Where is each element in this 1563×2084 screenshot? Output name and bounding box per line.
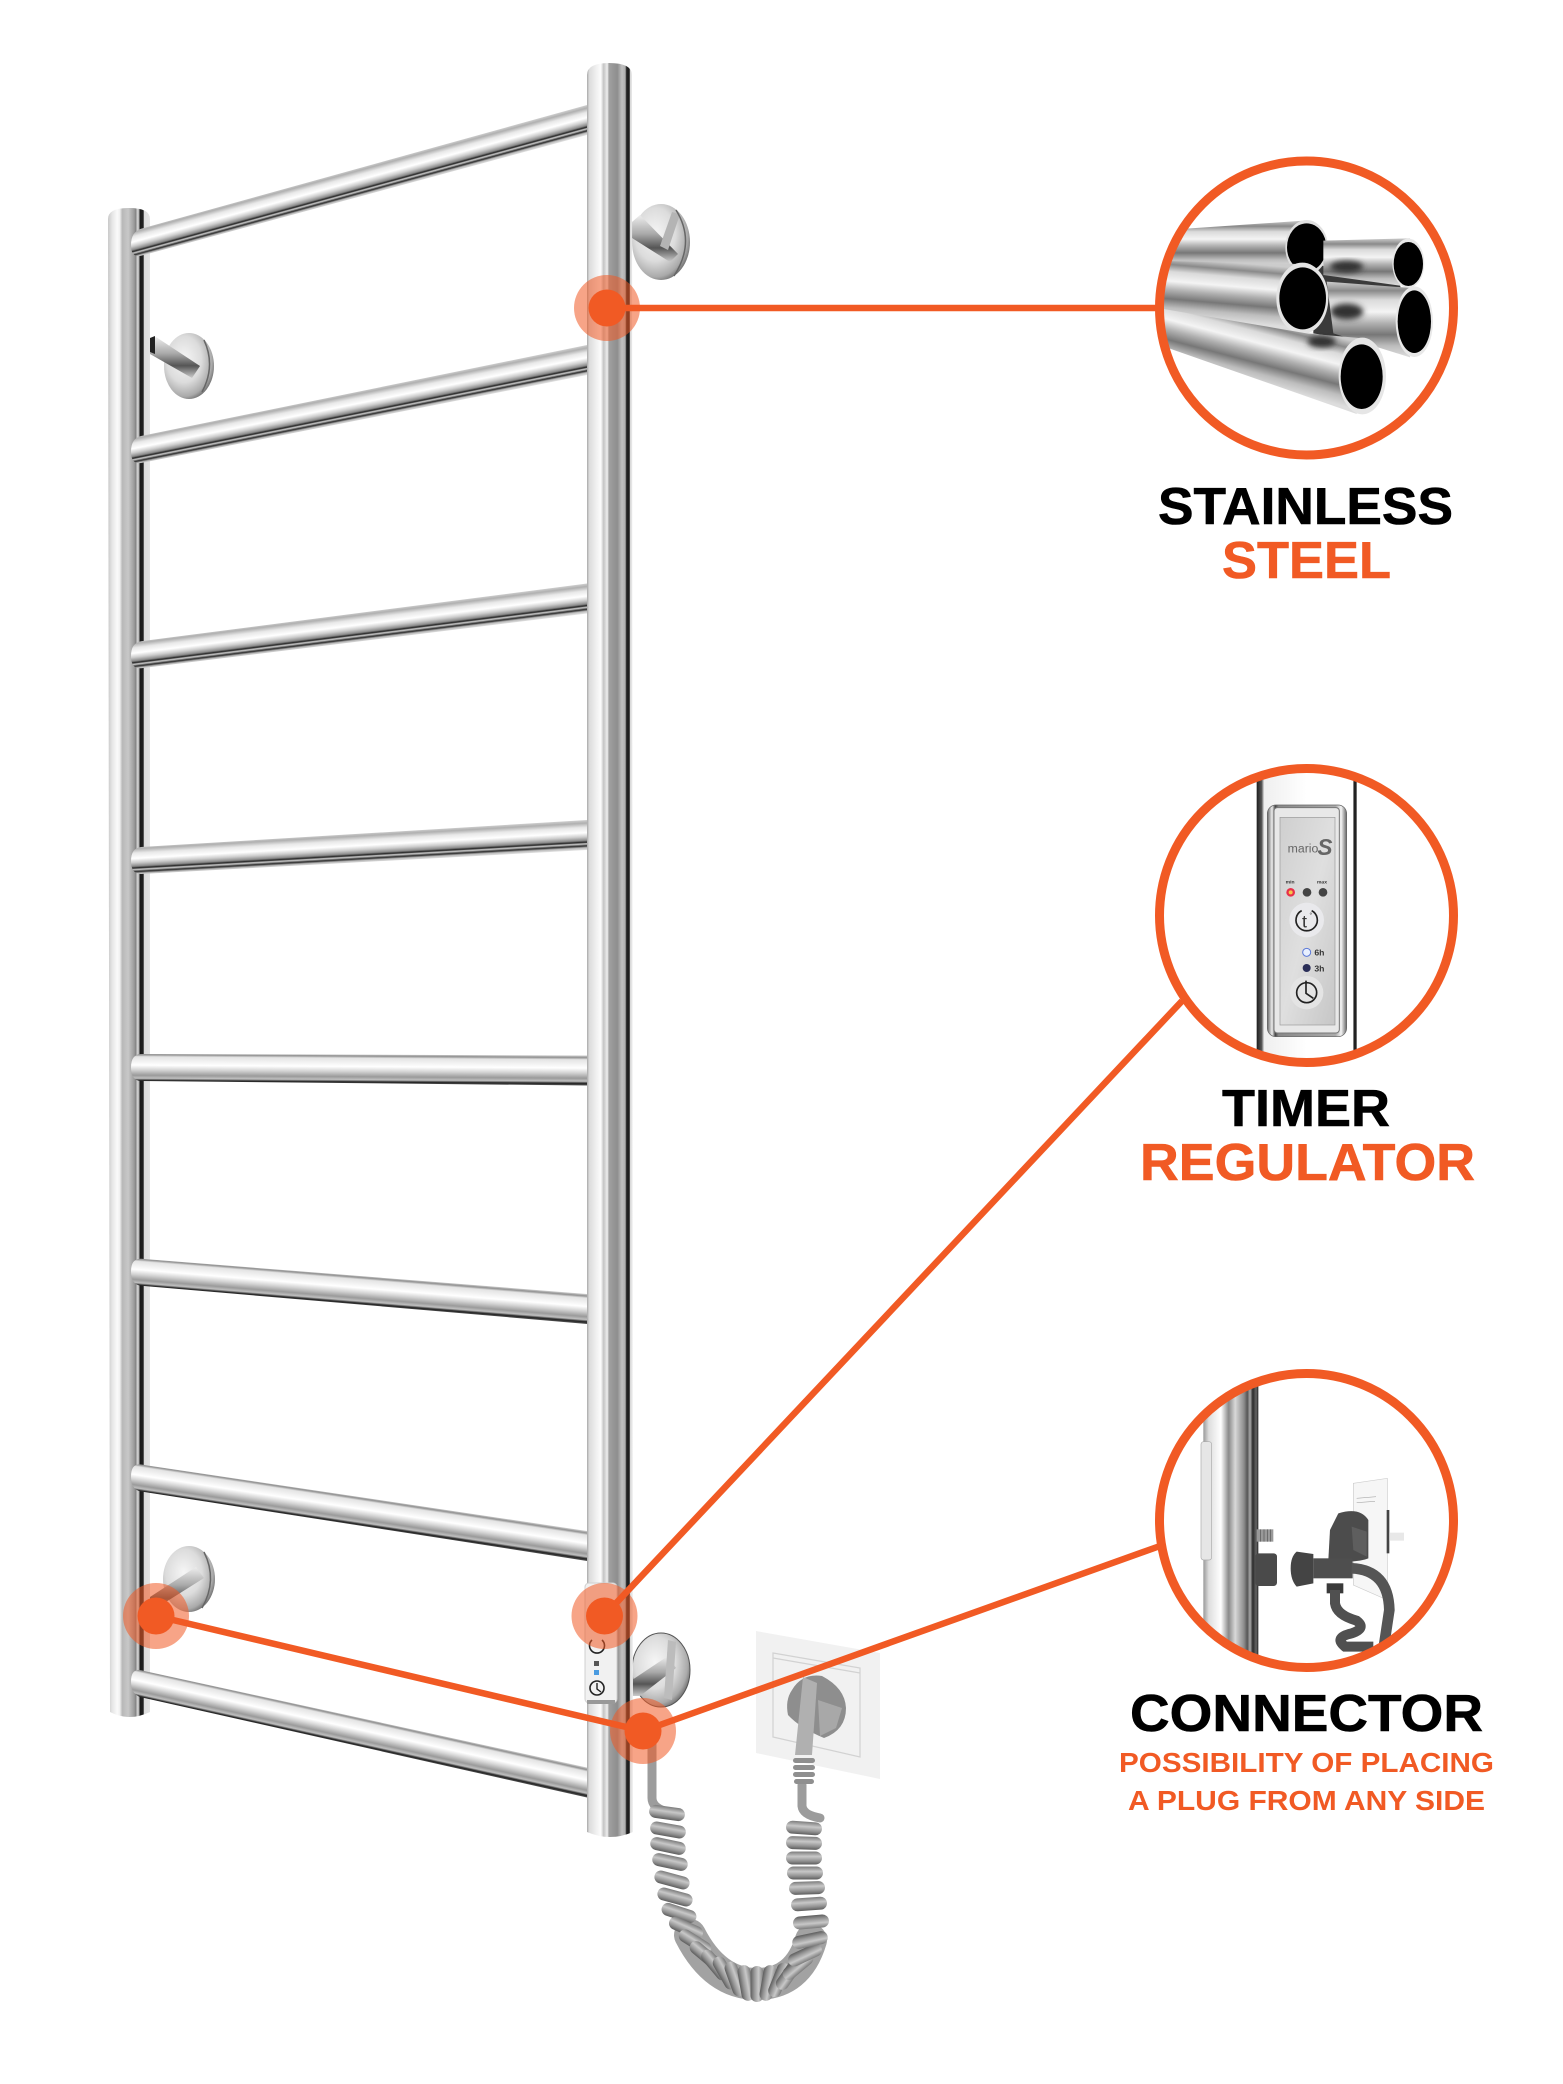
detail circle: control panel: S	[1317, 834, 1332, 860]
panel: connector	[1119, 1370, 1494, 1816]
detail circle: connector	[1160, 1370, 1454, 1677]
detail circle: control panel: min	[1286, 879, 1295, 885]
panel: stainless steel	[1150, 161, 1454, 590]
panel: timer regulator	[1140, 760, 1475, 1192]
heading: stainless steel: STAINLESS	[1158, 478, 1453, 536]
leader line: connector	[643, 1546, 1160, 1731]
control box on post	[585, 1583, 617, 1704]
marker: timer point	[572, 1583, 638, 1649]
plug and spiral cord	[648, 1676, 846, 2002]
left vertical post	[108, 208, 150, 1717]
wall mount: lower left	[150, 1546, 215, 1612]
leader line: left marker to connector marker	[156, 1616, 643, 1731]
heading: connector: CONNECTOR	[1130, 1685, 1483, 1743]
detail circle: control panel: t	[1302, 911, 1307, 931]
detail circle: control panel: °	[1309, 910, 1312, 919]
marker: stainless steel point	[574, 275, 640, 341]
leader line: timer regulator	[604, 1001, 1182, 1616]
detail circle: control panel: 6h	[1314, 948, 1324, 958]
marker: connector point	[610, 1698, 676, 1764]
caption: connector: POSSIBILITY OF PLACING	[1119, 1747, 1494, 1778]
wall mount: upper left	[150, 333, 214, 399]
detail circle: steel tubes	[1150, 161, 1454, 455]
wall mount: upper right	[632, 204, 690, 280]
detail circle: control panel: mario	[1288, 841, 1319, 855]
heading: timer regulator: REGULATOR	[1140, 1134, 1475, 1192]
horizontal bars	[131, 105, 587, 1798]
detail circle: control panel: max	[1317, 879, 1327, 885]
caption: connector	[1119, 1747, 1494, 1816]
caption: connector: A PLUG FROM ANY SIDE	[1128, 1785, 1485, 1816]
marker: lower left point	[123, 1583, 189, 1649]
detail circle: control panel	[1160, 760, 1454, 1067]
heading: stainless steel	[1158, 478, 1453, 590]
wall socket	[756, 1631, 880, 1779]
towel rail product	[108, 63, 690, 1837]
wall mount: lower right	[632, 1633, 690, 1707]
detail circle: control panel: 3h	[1314, 963, 1324, 973]
right vertical post	[587, 63, 633, 1837]
heading: timer regulator: TIMER	[1222, 1080, 1390, 1138]
leader line: stainless steel	[607, 305, 1158, 311]
heading: stainless steel: STEEL	[1222, 532, 1391, 590]
heading: timer regulator	[1140, 1080, 1475, 1192]
